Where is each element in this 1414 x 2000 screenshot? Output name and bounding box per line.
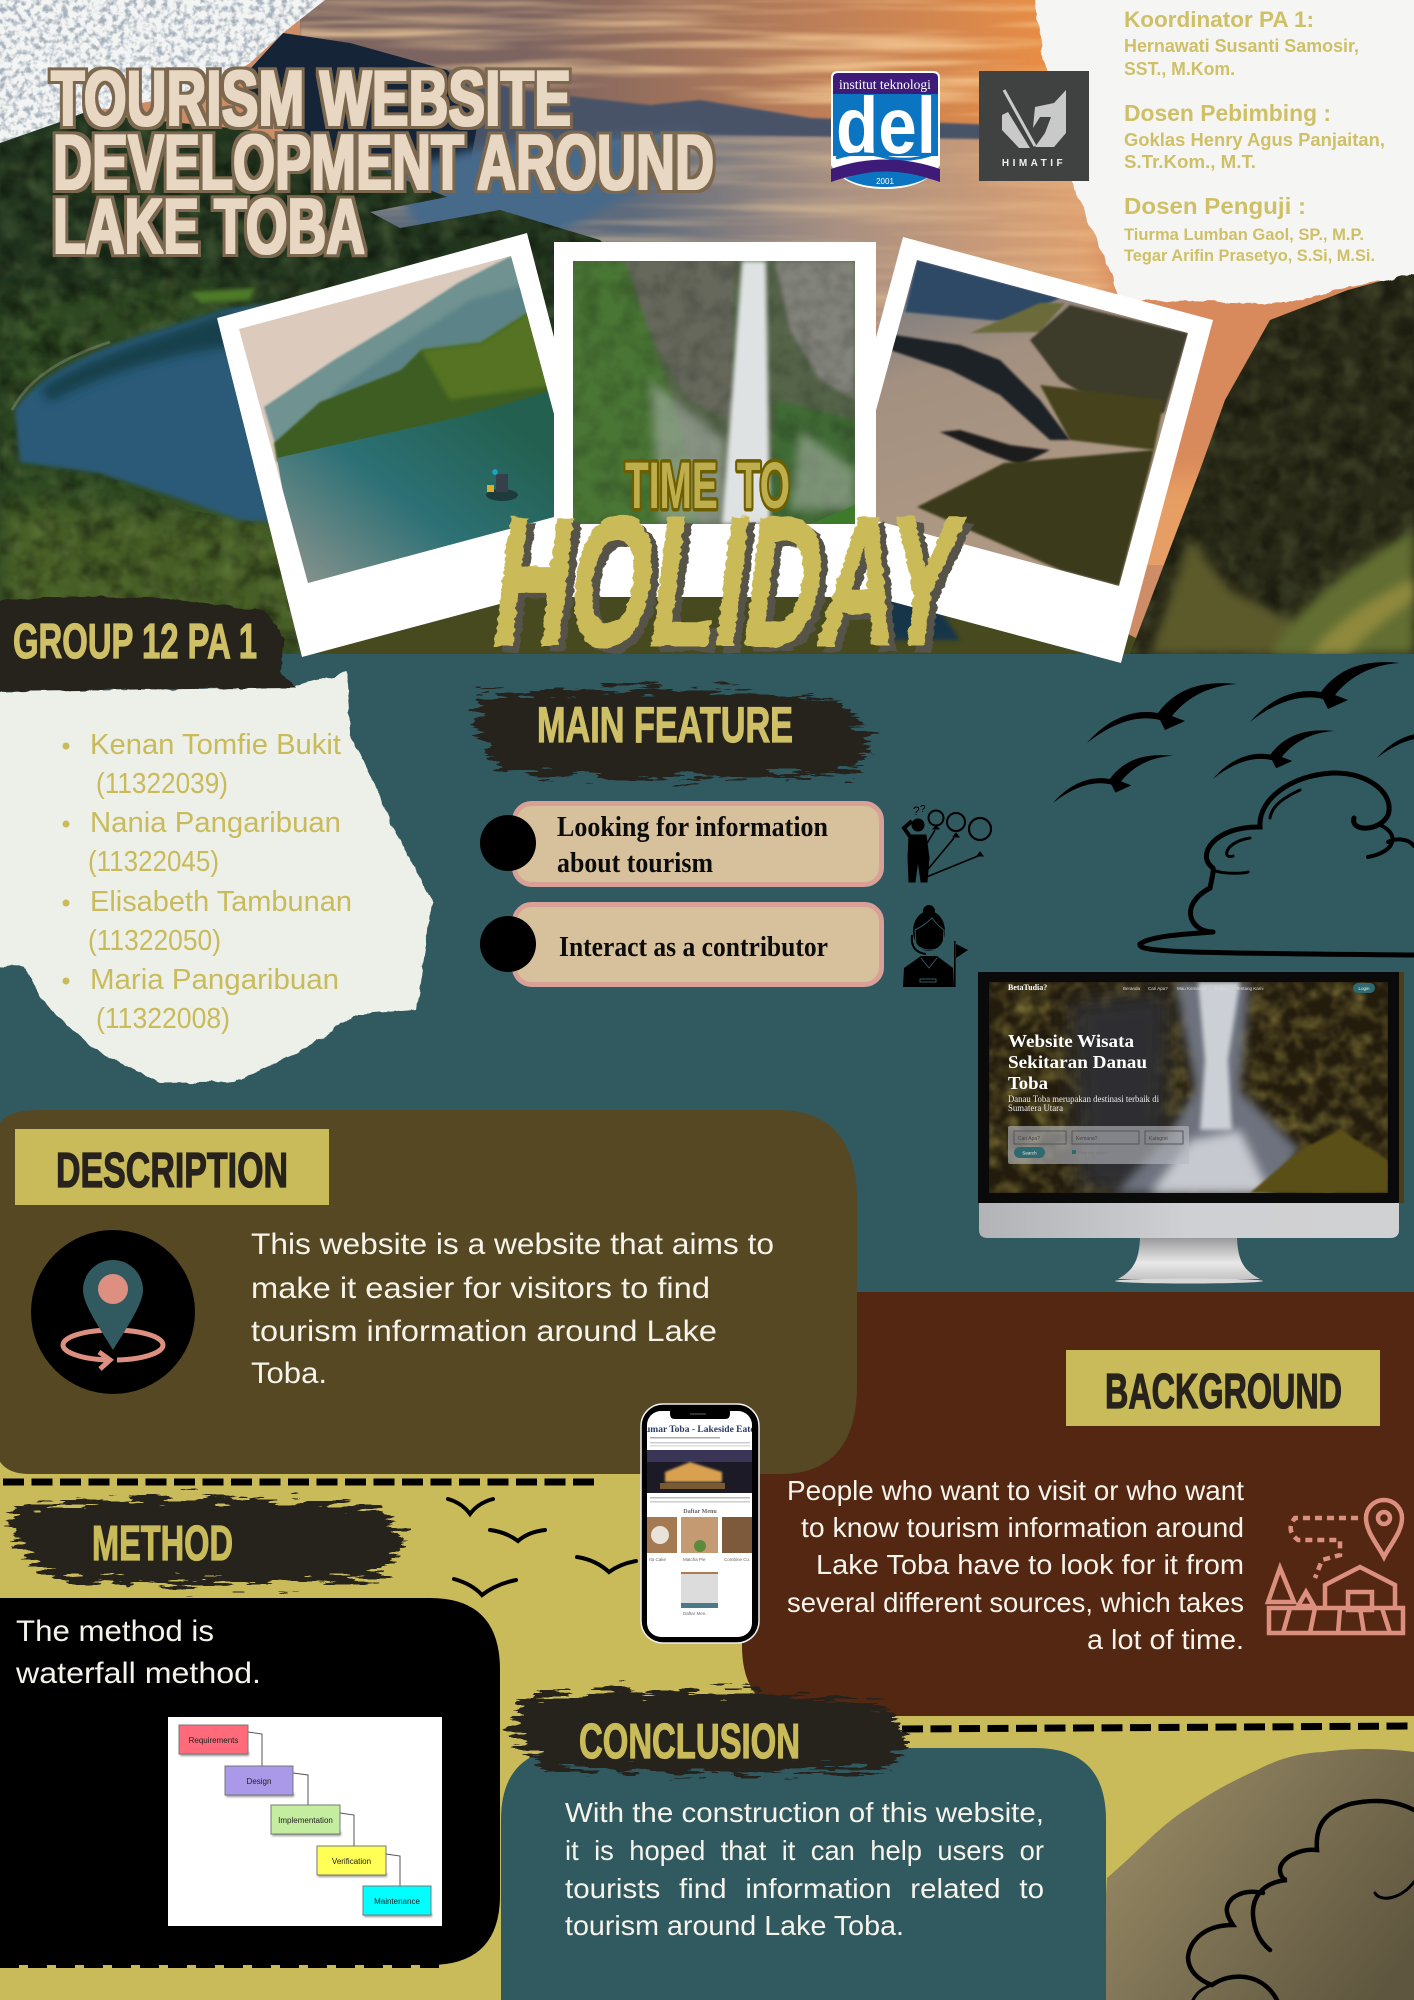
dashed divider right (902, 1726, 1414, 1729)
imac mockup with website screenshot (978, 972, 1404, 1284)
waterfall diagram: Design (247, 1777, 271, 1786)
heading: main feature: MAIN FEATURE (537, 697, 793, 753)
torn paper top left (0, 0, 340, 150)
logo: institut teknologi del (831, 71, 940, 189)
left polaroid (217, 233, 554, 657)
panel: method: waterfall method. (15, 1657, 261, 1690)
panel: team members (0, 672, 431, 1083)
panel: conclusion: tourism around Lake Toba. (565, 1910, 904, 1941)
waterfall diagram: Verification (332, 1857, 371, 1866)
title: DEVELOPMENT AROUND (53, 118, 714, 206)
panel: background text: People who want to visit or who want (787, 1475, 1244, 1506)
lecturers text: Goklas Henry Agus Panjaitan, (1124, 130, 1385, 150)
icon: tour guide (903, 905, 968, 987)
phone mockup (640, 1403, 760, 1644)
bottom right gradient hill (1100, 1749, 1414, 2000)
lecturers text: S.Tr.Kom., M.T. (1124, 152, 1256, 172)
time to holiday headline: HOLIDAY (491, 486, 978, 689)
lecturers text: Dosen Penguji : (1124, 193, 1306, 219)
right polaroid (876, 237, 1213, 663)
panel: description: tourism information around Lake (251, 1315, 717, 1348)
panel: description: Toba. (251, 1357, 327, 1390)
torn paper top right (1033, 0, 1414, 303)
feature: interact as a contributor (480, 904, 882, 984)
lecturers text: SST., M.Kom. (1124, 59, 1235, 79)
panel: background text (787, 1350, 1380, 1655)
icon: location pin with rotate arrow (31, 1230, 195, 1394)
title: TOURISM WEBSITE (51, 54, 571, 142)
lecturers text: Hernawati Susanti Samosir, (1124, 36, 1359, 56)
olive lower background (0, 1440, 1414, 2000)
panel: description: make it easier for visitors to find (251, 1272, 710, 1305)
heading: conclusion (512, 1690, 905, 1773)
icon: confused person with map pins: ? (920, 804, 926, 815)
panel: method (0, 1598, 500, 1965)
logo: himatif (979, 71, 1089, 181)
logo: institut teknologi del: del (836, 81, 936, 170)
phone mockup: Matcha Pie (683, 1557, 706, 1562)
panel: team members: (11322050) (88, 925, 221, 957)
panel: team members: (11322045) (88, 846, 219, 878)
lecturers text (1124, 7, 1385, 265)
panel: team members: Elisabeth Tambunan (90, 886, 352, 918)
waterfall diagram: Maintenance (374, 1897, 420, 1906)
imac mockup with website screenshot: Toba (1008, 1073, 1048, 1093)
imac mockup with website screenshot: Sumatera Utara (1008, 1103, 1063, 1113)
panel: team members: Kenan Tomfie Bukit (90, 729, 341, 761)
flying birds (1053, 662, 1414, 803)
phone mockup: Combine Co. (724, 1557, 750, 1562)
lecturers text: Koordinator PA 1: (1124, 7, 1314, 32)
icon: confused person with map pins (904, 804, 991, 882)
title: LAKE TOBA (53, 182, 365, 270)
heading: group 12 pa 1 (0, 596, 295, 691)
imac mockup with website screenshot: Kemana? (1076, 1136, 1098, 1142)
heading: method (8, 1498, 405, 1584)
phone mockup: rta Cake (649, 1557, 667, 1562)
imac mockup with website screenshot: Beranda (1123, 986, 1141, 991)
feature: interact as a contributor: Interact as a contributor (559, 931, 828, 963)
heading: group 12 pa 1: GROUP 12 PA 1 (13, 615, 257, 669)
panel: description (0, 1110, 857, 1474)
phone mockup: Daftar Men.. (683, 1611, 708, 1616)
logo: himatif: HIMATIF (1002, 158, 1066, 169)
waterfall diagram: Requirements (189, 1736, 238, 1745)
panel: background text: several different sources, which takes (787, 1587, 1244, 1618)
page background teal (0, 654, 1414, 1154)
panel: method: The method is (16, 1615, 214, 1648)
imac mockup with website screenshot: Cari Apa? (1148, 986, 1168, 991)
lake toba landscape photo background (0, 0, 1414, 654)
panel: conclusion: it is hoped that it can help users or (565, 1835, 1044, 1866)
waterfall diagram: Implementation (278, 1816, 333, 1825)
imac mockup with website screenshot: Sekitaran Danau (1008, 1052, 1147, 1072)
logo: institut teknologi del: institut teknologi (839, 77, 931, 92)
panel: background text: to know tourism information around (801, 1512, 1244, 1543)
panel: team members: (11322008) (96, 1003, 230, 1035)
panel: team members: (11322039) (96, 768, 228, 800)
center polaroid (554, 242, 876, 597)
panel: background text: Lake Toba have to look for it from (816, 1549, 1244, 1580)
feature: looking for information: about tourism (557, 847, 713, 879)
waterfall diagram (168, 1717, 442, 1926)
lecturers text: Tiurma Lumban Gaol, SP., M.P. (1124, 226, 1364, 244)
time to holiday headline (484, 448, 978, 689)
imac mockup with website screenshot: Tentang Kami (1236, 986, 1264, 991)
logo: institut teknologi del: 2001 (876, 177, 894, 186)
cloud outline (1140, 773, 1414, 955)
icon: confused person with map pins: ? (913, 804, 920, 818)
panel: conclusion (501, 1748, 1106, 2000)
imac mockup with website screenshot: Save this search (1078, 1150, 1108, 1155)
heading: conclusion: CONCLUSION (579, 1715, 800, 1769)
imac mockup with website screenshot: Galeri (1215, 986, 1227, 991)
imac mockup with website screenshot: Website Wisata (1008, 1031, 1134, 1051)
imac mockup with website screenshot: Search (1022, 1150, 1037, 1156)
panel: team members: Nania Pangaribuan (90, 807, 341, 839)
time to holiday headline: TIME TO (625, 448, 790, 522)
imac mockup with website screenshot: Danau Toba merupakan destinasi terbaik di (1008, 1094, 1159, 1104)
cloud outline bottom right (1188, 1801, 1414, 2000)
imac mockup with website screenshot: BetaTudia? (1008, 983, 1047, 992)
lecturers text: Tegar Arifin Prasetyo, S.Si, M.Si. (1124, 247, 1375, 265)
panel: background (brown) (742, 1292, 1414, 1716)
icon: farm and route (1268, 1500, 1403, 1633)
panel: team members: Maria Pangaribuan (90, 964, 339, 996)
title (51, 54, 714, 270)
imac mockup with website screenshot: Cari Apa? (1018, 1136, 1040, 1142)
lecturers text: Dosen Pebimbing : (1124, 100, 1331, 126)
imac mockup with website screenshot: Kategori (1149, 1136, 1168, 1142)
panel: description: This website is a website that aims to (251, 1228, 774, 1261)
imac mockup with website screenshot: Mau Kemana? (1177, 986, 1207, 991)
feature: looking for information (480, 804, 882, 884)
panel: conclusion: tourists find information related to (565, 1873, 1044, 1904)
panel: description: DESCRIPTION (56, 1144, 288, 1198)
heading: main feature (476, 689, 870, 778)
dashed divider left (3, 1478, 595, 1486)
small birds (448, 1499, 636, 1595)
panel: background text: a lot of time. (1087, 1624, 1244, 1655)
heading: method: METHOD (92, 1517, 233, 1571)
time to holiday headline: HOLIDAY (484, 480, 971, 683)
panel: conclusion: With the construction of this website, (565, 1797, 1044, 1828)
feature: looking for information: Looking for information (557, 811, 828, 843)
phone mockup: Daftar Menu (683, 1509, 717, 1515)
imac mockup with website screenshot: Login (1358, 986, 1370, 991)
phone mockup: umar Toba - Lakeside Eatery & St (645, 1425, 786, 1435)
